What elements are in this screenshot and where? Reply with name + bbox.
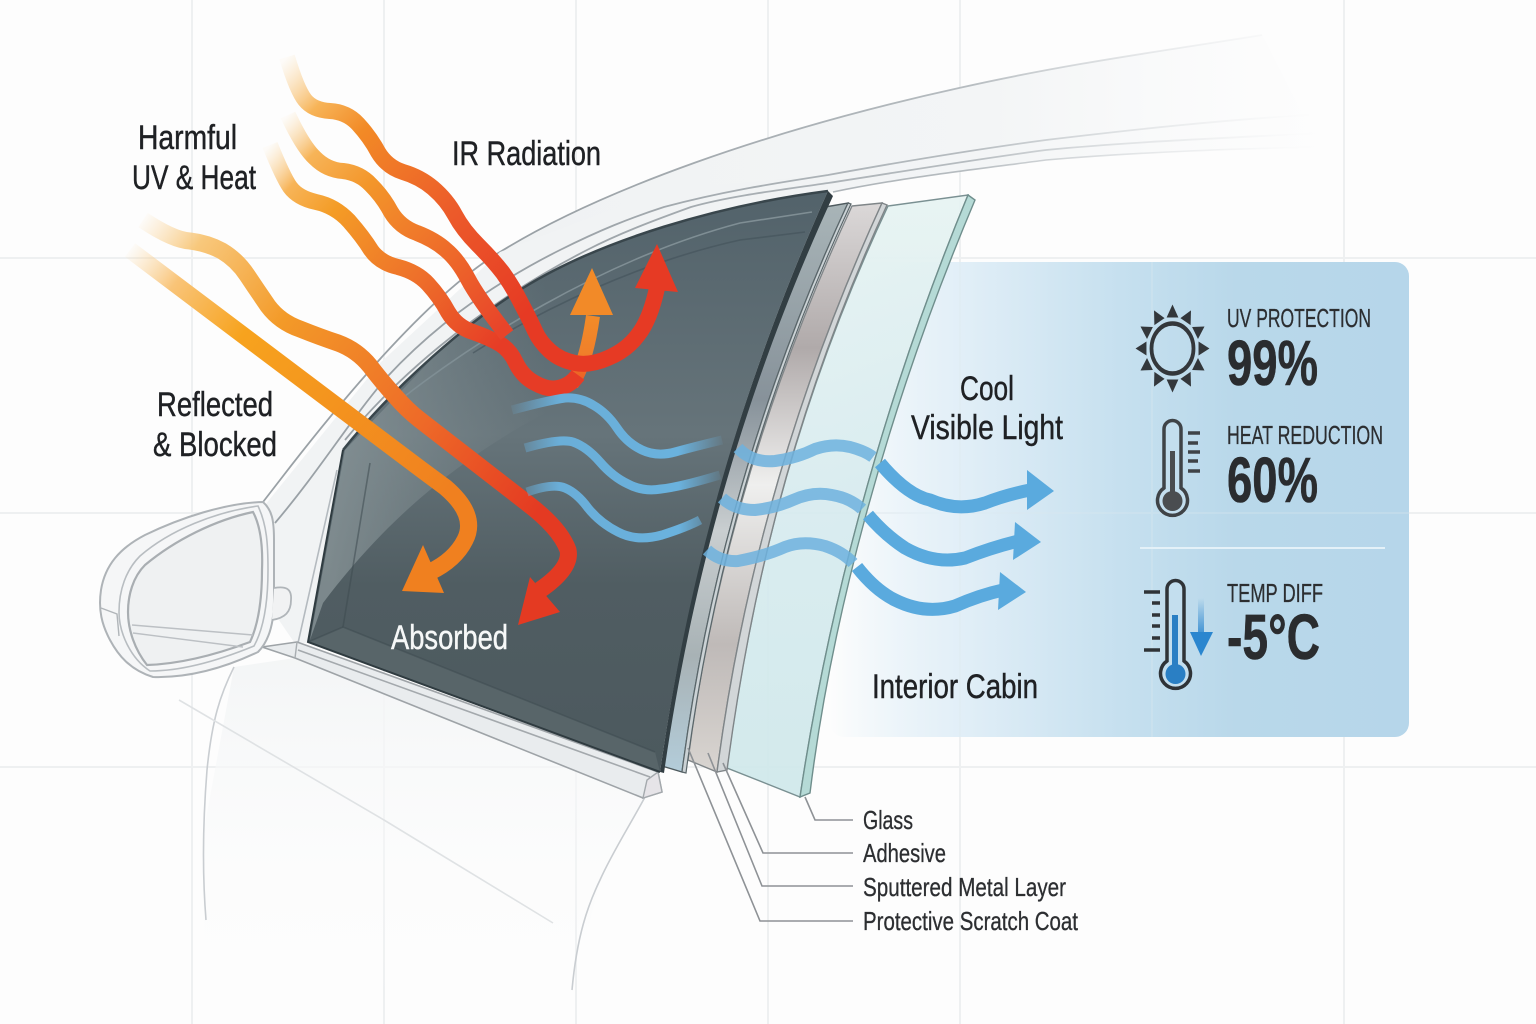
- leader lines to layer labels: [688, 748, 853, 921]
- label: Reflected & Blocked: [153, 386, 277, 464]
- cool visible light waves: [512, 398, 1054, 610]
- layer: glass: [727, 195, 975, 797]
- layer: sputtered metal: [662, 203, 848, 772]
- arrowhead: bottom blue: [998, 572, 1026, 610]
- label: Cool Visible Light: Visible Light: [911, 409, 1063, 447]
- wave: middle through layers: [722, 494, 862, 510]
- wave: middle inside glass: [525, 441, 720, 490]
- icon: temperature drop thermometer: [1144, 580, 1213, 688]
- icon: heat thermometer: [1158, 420, 1200, 515]
- layer labels: Protective Scratch Coat: [863, 906, 1079, 936]
- wave: bottom inside glass: [527, 486, 700, 538]
- label: Cool Visible Light: Cool: [960, 370, 1014, 408]
- A-pillar frame: [265, 115, 1320, 645]
- wave: top through layers: [738, 445, 873, 461]
- arrowhead: orange down: [402, 545, 444, 593]
- label: Harmful UV & Heat: UV & Heat: [132, 159, 256, 197]
- arrowhead: red down: [518, 577, 560, 625]
- stat: heat reduction: 60%: [1227, 444, 1318, 516]
- label: Harmful UV & Heat: [132, 119, 256, 197]
- wave: middle IR wave: [288, 115, 507, 335]
- icon: sun: [1136, 304, 1209, 392]
- wave: bottom through layers: [707, 543, 853, 563]
- layer labels: Glass: [863, 805, 913, 835]
- wave: lower IR wave: [270, 145, 578, 388]
- layer labels: [863, 805, 1079, 936]
- stat: temp diff: -5°C: [1227, 601, 1320, 673]
- side mirror: [100, 502, 291, 677]
- window sill: [262, 642, 662, 798]
- wave: top exit: [880, 463, 1030, 507]
- label: Cool Visible Light: [911, 370, 1063, 447]
- label: IR Radiation: IR Radiation: [452, 135, 601, 173]
- stat: UV protection: UV PROTECTION: [1227, 303, 1371, 333]
- layer: protective scratch coat: [682, 203, 851, 773]
- panel: performance stats background: [830, 262, 1409, 737]
- roof swoosh lines: [263, 35, 1320, 502]
- heat arrows: IR radiation and UV waves: [130, 57, 678, 625]
- car body and door: [179, 658, 645, 1000]
- stat: UV protection: [1227, 303, 1371, 399]
- stem: orange rising arrow: [572, 316, 593, 384]
- wave: top inside glass: [512, 398, 722, 454]
- wave: reflected and blocked red: [143, 220, 568, 590]
- wave: top IR wave: [287, 57, 657, 364]
- wave: middle exit: [868, 515, 1018, 560]
- stat: temp diff: TEMP DIFF: [1227, 578, 1323, 608]
- layer: adhesive: [688, 203, 887, 772]
- wave: bottom exit: [857, 567, 1003, 609]
- arrowhead: middle blue: [1013, 522, 1041, 560]
- label: Absorbed: Absorbed: [391, 619, 508, 657]
- stat: heat reduction: [1227, 420, 1383, 516]
- stat: temp diff: [1227, 578, 1323, 673]
- ray: absorbed orange: [130, 250, 469, 572]
- divider: [1140, 547, 1385, 549]
- label: Harmful UV & Heat: Harmful: [138, 119, 237, 157]
- stat: UV protection: 99%: [1227, 327, 1318, 399]
- arrowhead: top blue: [1027, 470, 1054, 510]
- label: Reflected & Blocked: Reflected: [157, 386, 273, 424]
- arrowhead: red up: [635, 244, 678, 292]
- label: Interior Cabin: Interior Cabin: [872, 668, 1038, 706]
- stat: heat reduction: HEAT REDUCTION: [1227, 420, 1383, 450]
- layer labels: Sputtered Metal Layer: [863, 872, 1066, 902]
- tinted window glass: [308, 191, 833, 773]
- label: Reflected & Blocked: & Blocked: [153, 426, 277, 464]
- layer labels: Adhesive: [863, 838, 946, 868]
- arrowhead: orange up: [570, 268, 613, 315]
